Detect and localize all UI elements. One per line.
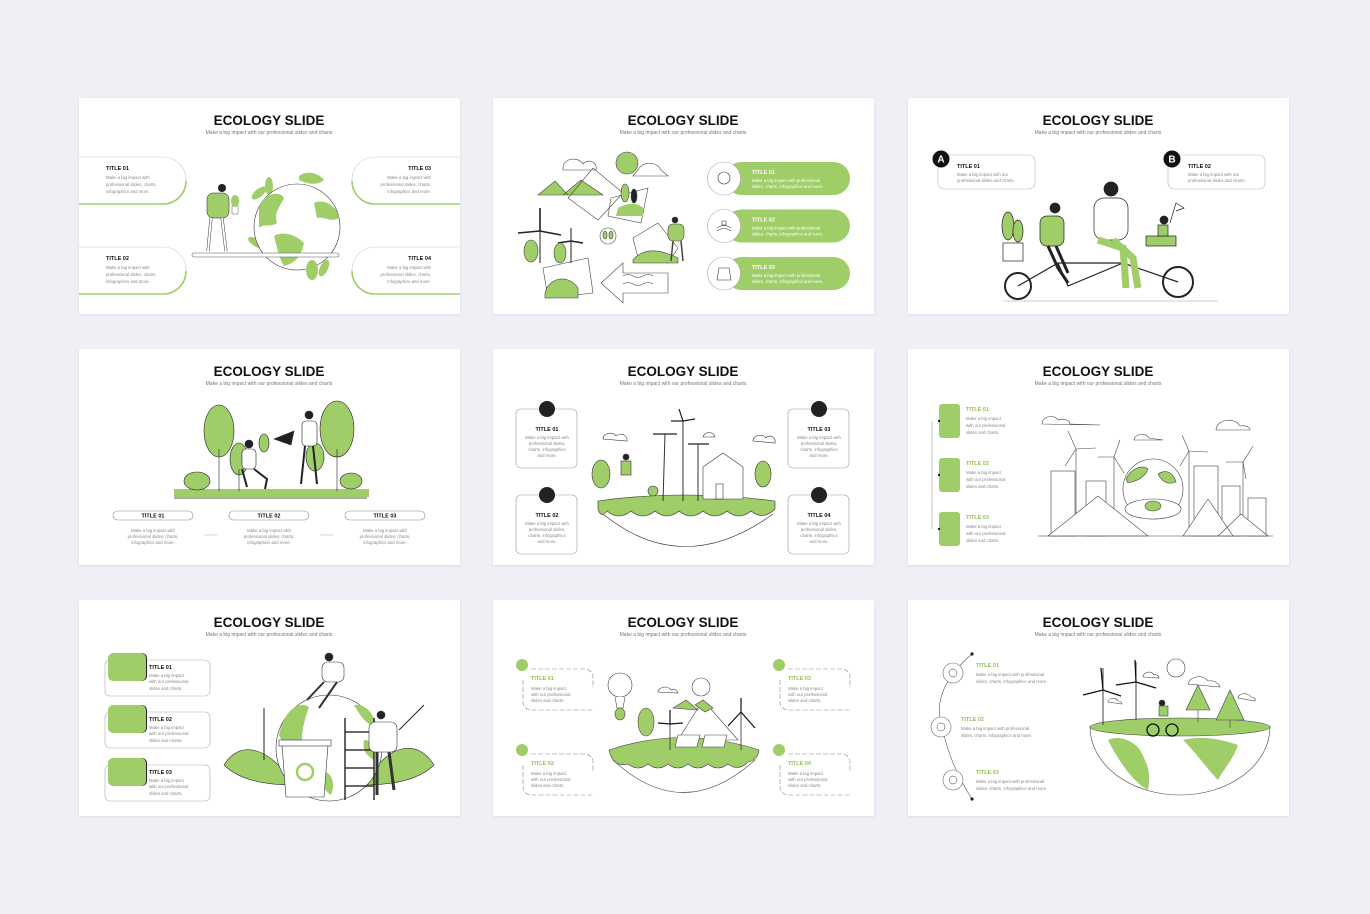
title: [620, 113, 747, 136]
card: title 04: professional slides,: [801, 527, 837, 532]
card B: professional slides and charts.: [1188, 178, 1246, 183]
title: [206, 113, 333, 136]
card: title 01: professional slides, charts,: [106, 182, 157, 187]
card: title 04: Make a big impact with: [387, 265, 432, 270]
card: title 03: and more.: [809, 453, 829, 458]
item: title 01: Make a big impact: [966, 416, 1002, 421]
block: title 02: slides and charts.: [531, 783, 564, 788]
card: title 03: Make a big impact with: [387, 175, 432, 180]
label: title 02: [229, 511, 309, 545]
label: title 01: [113, 511, 193, 545]
title: ECOLOGY SLIDE: [628, 615, 738, 630]
title: [620, 615, 747, 638]
label: title 02: infographics and more.: [247, 540, 291, 545]
card: title 02: Make a big impact with: [525, 521, 569, 526]
title: Make a big impact with our professional slides and charts: [620, 130, 747, 136]
item: title 02: slides, charts, infographics and more.: [961, 733, 1032, 738]
pill: title 03: TITLE 03: [752, 265, 775, 271]
card: title 04: Make a big impact with: [797, 521, 841, 526]
card A: A: [937, 154, 945, 166]
card A: TITLE 01: [957, 164, 980, 170]
card: title 01: [59, 157, 186, 204]
card: title 01: with our professional: [149, 679, 188, 684]
block: title 04: Make a big impact: [788, 771, 824, 776]
card B: Make a big impact with our: [1188, 172, 1240, 177]
card: title 04: professional slides, charts,: [380, 272, 431, 277]
card: title 02: professional slides, charts,: [106, 272, 157, 277]
card: title 03: charts, infographics: [800, 447, 838, 452]
slide 6: green city: [908, 349, 1289, 565]
card B: TITLE 02: [1188, 164, 1211, 170]
card: title 01: Make a big impact with: [106, 175, 150, 180]
card: title 04: infographics and more.: [387, 279, 431, 284]
title: Make a big impact with our professional slides and charts: [1035, 632, 1162, 638]
pill: title 02: slides, charts, infographics and more.: [752, 232, 823, 236]
slide 3: tandem bike: [908, 98, 1289, 314]
block: title 04: slides and charts.: [788, 783, 821, 788]
label: title 02: Make a big impact with: [247, 528, 291, 533]
title: Make a big impact with our professional slides and charts: [206, 381, 333, 387]
card A: [932, 150, 1035, 189]
card: title 03: [352, 157, 482, 204]
card: title 01: slides and charts.: [149, 686, 182, 691]
card: title 04: [352, 247, 482, 294]
item: title 01: TITLE 01: [976, 663, 999, 669]
title: ECOLOGY SLIDE: [214, 364, 324, 379]
item: title 01: slides, charts, infographics and more.: [976, 679, 1047, 684]
card: title 04: TITLE 04: [408, 256, 432, 262]
pill: title 02: [708, 210, 850, 242]
illustration: city with wind turbines: [1038, 417, 1273, 536]
card A: professional slides and charts.: [957, 178, 1015, 183]
block: title 04: TITLE 04: [788, 761, 812, 767]
item: title 03: slides and charts.: [966, 538, 999, 543]
block: title 01: [516, 659, 593, 710]
pill: title 01: Make a big impact with professional: [752, 178, 820, 183]
label: title 01: professional slides, charts,: [128, 534, 178, 539]
pill: title 01: slides, charts, infographics and more.: [752, 184, 823, 189]
label: title 01: TITLE 01: [142, 514, 164, 520]
card: title 02: and more.: [537, 539, 557, 544]
item: title 02: TITLE 02: [961, 717, 984, 723]
card: title 01: and more.: [537, 453, 557, 458]
title: Make a big impact with our professional slides and charts: [1035, 381, 1162, 387]
pill: title 02: TITLE 02: [752, 218, 775, 224]
item: title 01: with our professional: [966, 423, 1005, 428]
card: title 02: Make a big impact with: [106, 265, 150, 270]
card: title 04: TITLE 04: [808, 513, 831, 519]
card: title 03: slides and charts.: [149, 791, 182, 796]
illustration: globe and person: [192, 173, 340, 280]
card: title 02: charts, infographics: [528, 533, 566, 538]
card: title 01: TITLE 01: [536, 427, 558, 433]
block: title 03: slides and charts.: [788, 698, 821, 703]
label: title 03: TITLE 03: [374, 514, 396, 520]
title: [206, 364, 333, 387]
slide 9: half globe with timeline: [908, 600, 1289, 816]
item: title 03: Make a big impact: [966, 524, 1002, 529]
card: title 03: with our professional: [149, 784, 188, 789]
card: title 03: [105, 758, 210, 801]
card: title 04: charts, infographics: [800, 533, 838, 538]
title: Make a big impact with our professional slides and charts: [620, 632, 747, 638]
item: title 03: TITLE 03: [966, 515, 989, 521]
card: title 01: [516, 401, 577, 468]
card: title 03: TITLE 03: [808, 427, 830, 433]
title: ECOLOGY SLIDE: [214, 113, 324, 128]
illustration: island with solar panels: [608, 673, 759, 792]
label: title 03: [345, 511, 425, 545]
label: title 01: Make a big impact with: [131, 528, 175, 533]
card: title 01: professional slides,: [529, 441, 565, 446]
item: title 01: [938, 404, 1005, 438]
card: title 01: charts, infographics: [528, 447, 566, 452]
slide 2: recycle scene with three pills: [493, 98, 874, 314]
card: title 03: professional slides,: [801, 441, 837, 446]
title: ECOLOGY SLIDE: [1043, 113, 1153, 128]
pill: title 01: TITLE 01: [752, 170, 775, 176]
block: title 01: TITLE 01: [531, 676, 554, 682]
item: title 01: slides and charts.: [966, 430, 999, 435]
block: title 04: with our professional: [788, 777, 827, 782]
card: title 02: infographics and more.: [106, 279, 150, 284]
item: title 02: Make a big impact: [966, 470, 1002, 475]
title: Make a big impact with our professional slides and charts: [1035, 130, 1162, 136]
title: [1035, 364, 1162, 387]
pill: title 03: [708, 257, 850, 290]
title: ECOLOGY SLIDE: [214, 615, 324, 630]
slide 4: planting trees with three labels: [79, 349, 460, 565]
title: ECOLOGY SLIDE: [1043, 615, 1153, 630]
item: title 01: Make a big impact with professional: [976, 672, 1044, 677]
title: Make a big impact with our professional slides and charts: [206, 130, 333, 136]
card: title 02: TITLE 02: [536, 513, 558, 519]
block: title 02: Make a big impact: [531, 771, 567, 776]
card: title 01: TITLE 01: [149, 665, 172, 671]
item: title 01: TITLE 01: [966, 407, 989, 413]
label: title 03: professional slides, charts,: [360, 534, 410, 539]
label: title 01: infographics and more.: [131, 540, 175, 545]
block: title 03: [773, 659, 850, 710]
item: title 02: Make a big impact with professional: [961, 726, 1029, 731]
pill: title 03: Make a big impact with professional: [752, 273, 820, 278]
card: title 02: TITLE 02: [106, 256, 129, 262]
item: title 03: TITLE 03: [976, 770, 999, 776]
illustration: recycle loop: [518, 152, 684, 303]
item: title 03: [938, 512, 1005, 546]
item: title 02: slides and charts.: [966, 484, 999, 489]
item: title 03: Make a big impact with professional: [976, 779, 1044, 784]
item: title 02: [938, 458, 1005, 492]
card: title 03: professional slides, charts,: [380, 182, 431, 187]
label: title 03: Make a big impact with: [363, 528, 407, 533]
block: title 01: slides and charts.: [531, 698, 564, 703]
card B: B: [1168, 154, 1176, 166]
label: title 02: professional slides, charts,: [244, 534, 294, 539]
item: title 01: [943, 663, 1047, 684]
card: title 03: Make a big impact: [149, 778, 185, 783]
illustration: globe, recycle bin, ladder: [224, 653, 434, 801]
block: title 02: with our professional: [531, 777, 570, 782]
pill: title 02: Make a big impact with professional: [752, 226, 820, 230]
card: title 04: [788, 487, 849, 554]
illustration: gardeners: [174, 401, 369, 498]
slide 5: village island with four cards: [493, 349, 874, 565]
block: title 03: TITLE 03: [788, 676, 811, 682]
card: title 02: Make a big impact: [149, 725, 185, 730]
card: title 01: Make a big impact: [149, 673, 185, 678]
slide 1: globe with four cards: [79, 98, 460, 314]
card: title 03: [788, 401, 849, 468]
card: title 02: professional slides,: [529, 527, 565, 532]
card: title 01: [105, 653, 210, 696]
title: ECOLOGY SLIDE: [1043, 364, 1153, 379]
illustration: half globe: [1083, 659, 1270, 795]
illustration: island village: [592, 409, 775, 546]
item: title 03: slides, charts, infographics and more.: [976, 786, 1047, 791]
item: title 02: [931, 717, 1032, 738]
card: title 04: and more.: [809, 539, 829, 544]
illustration: tandem bike: [1002, 182, 1218, 301]
item: title 02: TITLE 02: [966, 461, 989, 467]
block: title 02: TITLE 02: [531, 761, 554, 767]
card: title 03: infographics and more.: [387, 189, 431, 194]
card: title 02: TITLE 02: [149, 717, 172, 723]
item: title 02: with our professional: [966, 477, 1005, 482]
slide 7: globe with bin and ladder: [79, 600, 460, 816]
title: Make a big impact with our professional slides and charts: [206, 632, 333, 638]
title: [1035, 113, 1162, 136]
block: title 03: with our professional: [788, 692, 827, 697]
title: ECOLOGY SLIDE: [628, 113, 738, 128]
title: [620, 364, 747, 387]
label: title 02: TITLE 02: [258, 514, 280, 520]
card: title 02: [516, 487, 577, 554]
slide 8: floating island with four blocks: [493, 600, 874, 816]
card: title 02: with our professional: [149, 731, 188, 736]
card B: [1164, 150, 1265, 189]
title: ECOLOGY SLIDE: [628, 364, 738, 379]
card: title 01: Make a big impact with: [525, 435, 569, 440]
block: title 03: Make a big impact: [788, 686, 824, 691]
block: title 01: with our professional: [531, 692, 570, 697]
card: title 01: infographics and more.: [106, 189, 150, 194]
card: title 03: TITLE 03: [149, 770, 172, 776]
title: [1035, 615, 1162, 638]
block: title 01: Make a big impact: [531, 686, 567, 691]
card: title 02: slides and charts.: [149, 738, 182, 743]
card: title 02: [59, 247, 186, 294]
title: [206, 615, 333, 638]
item: title 03: with our professional: [966, 531, 1005, 536]
block: title 02: [516, 744, 593, 795]
pill: title 01: [708, 162, 850, 195]
label: title 03: infographics and more.: [363, 540, 407, 545]
card: title 03: TITLE 03: [408, 166, 431, 172]
card: title 03: Make a big impact with: [797, 435, 841, 440]
card: title 02: [105, 705, 210, 748]
title: Make a big impact with our professional slides and charts: [620, 381, 747, 387]
card A: Make a big impact with our: [957, 172, 1009, 177]
pill: title 03: slides, charts, infographics and more.: [752, 279, 823, 284]
card: title 01: TITLE 01: [106, 166, 129, 172]
item: title 03: [943, 770, 1047, 791]
block: title 04: [773, 744, 850, 795]
